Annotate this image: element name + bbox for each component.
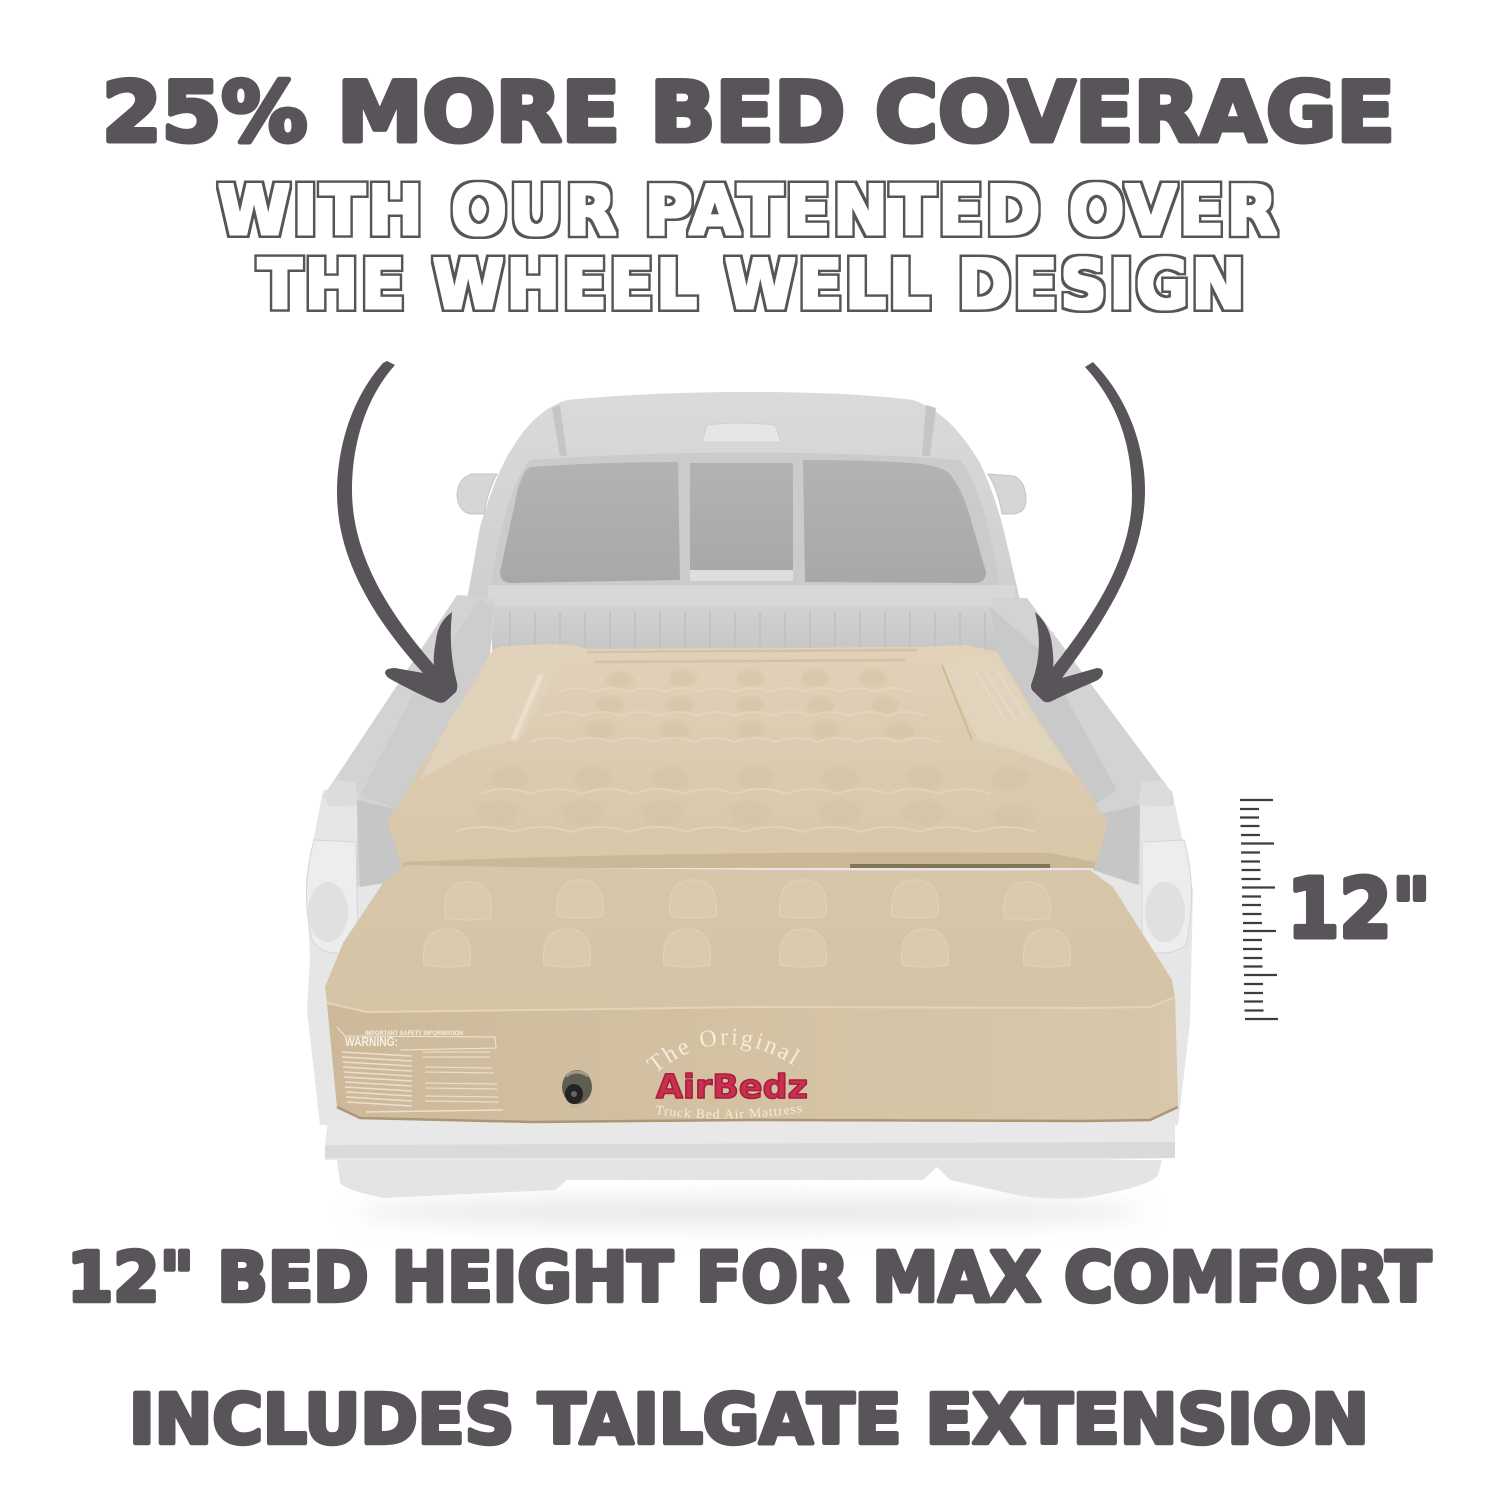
truck cab [457,392,1026,600]
height label: 12" [1287,862,1431,957]
mattress: tailgate extension [325,865,1178,1124]
logo: AirBedz [646,1028,808,1119]
logo: AirBedz: AirBedz [656,1067,808,1106]
shadow [355,1198,1145,1226]
logo: AirBedz: The Original [646,1028,800,1072]
mattress: upper section [387,644,1108,868]
truck body and rails [306,585,1193,1125]
caption: tailgate extension: INCLUDES TAILGATE EXTENSION [129,1380,1369,1460]
caption: bed height: 12" BED HEIGHT FOR MAX COMFORT [67,1238,1431,1318]
rear window [500,462,680,583]
logo: AirBedz: Truck Bed Air Mattress [656,1105,802,1119]
mirrors [457,474,497,514]
bumper [325,1120,1175,1199]
seams: scallop rows [455,688,1035,832]
tufts: bed surface [476,669,1034,830]
warning label [337,1027,503,1112]
subtitle: outlined text: WITH OUR PATENTED OVER [218,172,1280,251]
title: 25% MORE BED COVERAGE [102,64,1395,161]
wheel well ledges [420,647,585,780]
warning label: IMPORTANT SAFETY INFORMATION [365,1030,463,1037]
tail lights [306,840,358,953]
arrow: left [337,361,457,703]
arrow: right [1031,362,1145,702]
subtitle: outlined text [218,172,1280,325]
tufts: tailgate [423,880,1071,967]
icon: air valve [562,1070,592,1108]
truck illustration [306,392,1193,1226]
warning label: WARNING: [345,1035,398,1049]
subtitle: outlined text: THE WHEEL WELL DESIGN [258,246,1248,325]
brake light [702,423,781,442]
height ruler [1240,800,1278,1019]
